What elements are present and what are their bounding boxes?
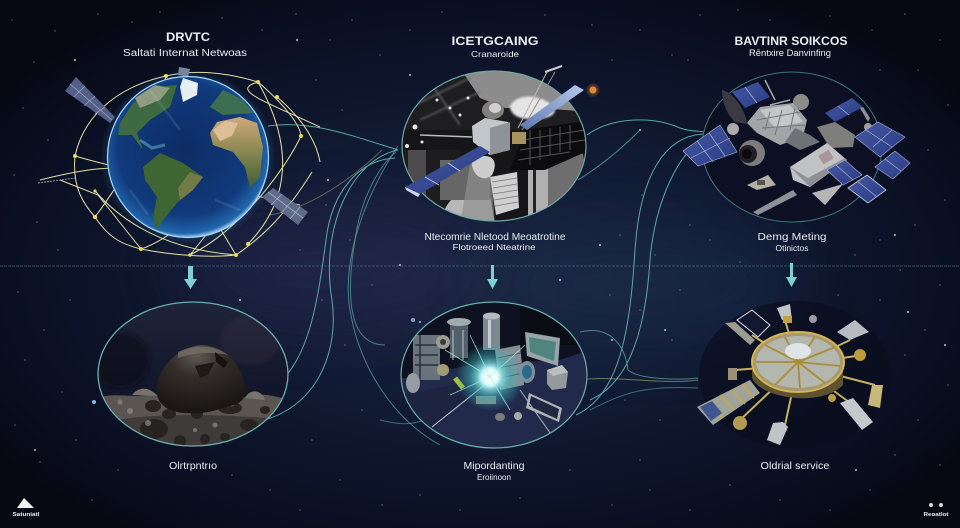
hub (785, 343, 811, 359)
ring spokes (756, 337, 840, 388)
satellite solar panel, lower right (262, 188, 308, 225)
caption line two: Otinictos (776, 244, 808, 253)
solar boom: lower left (697, 380, 760, 425)
heading: imaging: ICETGCAING (452, 34, 538, 48)
equipment: glass column (447, 318, 471, 360)
satellite solar panel, upper left (65, 77, 115, 123)
caption: Olrtrpntrıo (169, 461, 217, 472)
truss machinery (817, 122, 872, 148)
ring top (752, 332, 844, 392)
equipment: solar tablet (526, 393, 562, 422)
image circle: spacecraft (400, 65, 590, 230)
caption: Oldrial service (760, 461, 830, 472)
energy burst (445, 335, 525, 411)
solar panel: top right (837, 320, 869, 340)
small satellite, top (178, 67, 190, 77)
arm (765, 80, 790, 105)
solar array: lower (827, 160, 862, 185)
image circle: dark orbit (702, 72, 882, 222)
solar array: upper right (825, 98, 870, 122)
equipment: monitor (525, 332, 560, 366)
panel: asteroid (90, 302, 290, 472)
equipment: grey box (547, 365, 568, 390)
icon: orange planet (587, 84, 599, 96)
white data panel (490, 172, 519, 215)
satellite dashed antenna (38, 178, 75, 183)
panel: global satellite network (38, 32, 320, 257)
logo: bottom left: Satuniatl (12, 512, 40, 518)
network nodes (73, 74, 303, 257)
solar array: bottom (848, 175, 886, 203)
image circle: laboratory (400, 300, 590, 450)
image circle: asteroid (90, 302, 290, 450)
horizontal divider line (0, 265, 960, 267)
subheading: satellite internet networks: Saltati Internat Netwoas (123, 48, 247, 59)
spokes and booms (735, 320, 875, 425)
gold sphere (854, 349, 866, 361)
solar array: far right (875, 151, 910, 179)
solar array: top (732, 82, 770, 108)
caption line two: Flotroeed Nteatrine (452, 242, 536, 252)
subheading: Rēntxire Danvinfing (749, 48, 831, 58)
solar array: right (855, 122, 905, 157)
boulder (157, 345, 245, 413)
satellite: lower left solar panel (405, 146, 490, 197)
solar panel: top (777, 304, 792, 320)
panel: lower right (840, 398, 873, 430)
solar panel: top left (725, 310, 770, 345)
lower module (790, 143, 847, 187)
small dish (809, 315, 817, 323)
caption line one: Mipordanting (464, 461, 524, 472)
network lines (40, 72, 320, 256)
earth globe (103, 72, 273, 242)
dish (722, 90, 747, 124)
ring station (697, 304, 883, 445)
caption line one: Ntecomrie Nletood Meoatrotine (424, 232, 566, 243)
can: left (728, 368, 737, 380)
gold joint, top (783, 316, 792, 323)
parts on floor (453, 376, 550, 433)
logo: bottom right: Reoatlot (924, 512, 949, 518)
satellite: main bus (420, 66, 562, 178)
dark backdrop circle (699, 301, 891, 449)
panel: orbital service (697, 301, 891, 472)
arrow: services to orbital service (786, 263, 797, 287)
heading: DRVTC: DRVTC (166, 32, 210, 44)
space station (683, 80, 910, 215)
arrow: imaging to lab (487, 265, 498, 289)
arrow: globe to asteroid (184, 266, 197, 289)
equipment: central box (495, 345, 524, 390)
heading: services: BAVTINR SOIKCOS (734, 34, 848, 48)
antenna sphere (793, 94, 809, 110)
logo: bottom left (12, 498, 40, 518)
panel: station services (683, 34, 910, 253)
caption line two: Eroiinoon (477, 472, 511, 482)
panel: bottom (767, 422, 788, 445)
can: right (868, 385, 883, 408)
satellite: upper right solar panel (520, 85, 584, 130)
subheading: Cranaroide (471, 49, 519, 59)
logo: bottom right (924, 503, 949, 518)
panel: manufacturing lab (400, 300, 590, 482)
small card module (747, 175, 776, 190)
robotic arm (753, 190, 797, 215)
equipment: left rack (413, 335, 450, 380)
gold joint, lower right (828, 394, 836, 402)
equipment: lens (406, 373, 420, 393)
caption line one: Demg Meting (758, 232, 826, 243)
hub ring lower wall (752, 362, 843, 398)
solar array: left (683, 125, 737, 166)
engine cylinder (739, 140, 765, 166)
equipment: tall cylinder (483, 312, 500, 350)
platform (812, 184, 843, 205)
panel: satellite imaging (400, 34, 599, 252)
equipment: round device (519, 361, 535, 383)
gold canister, lower left (733, 416, 747, 430)
main module (727, 103, 820, 150)
connector curves between stages (240, 120, 705, 445)
